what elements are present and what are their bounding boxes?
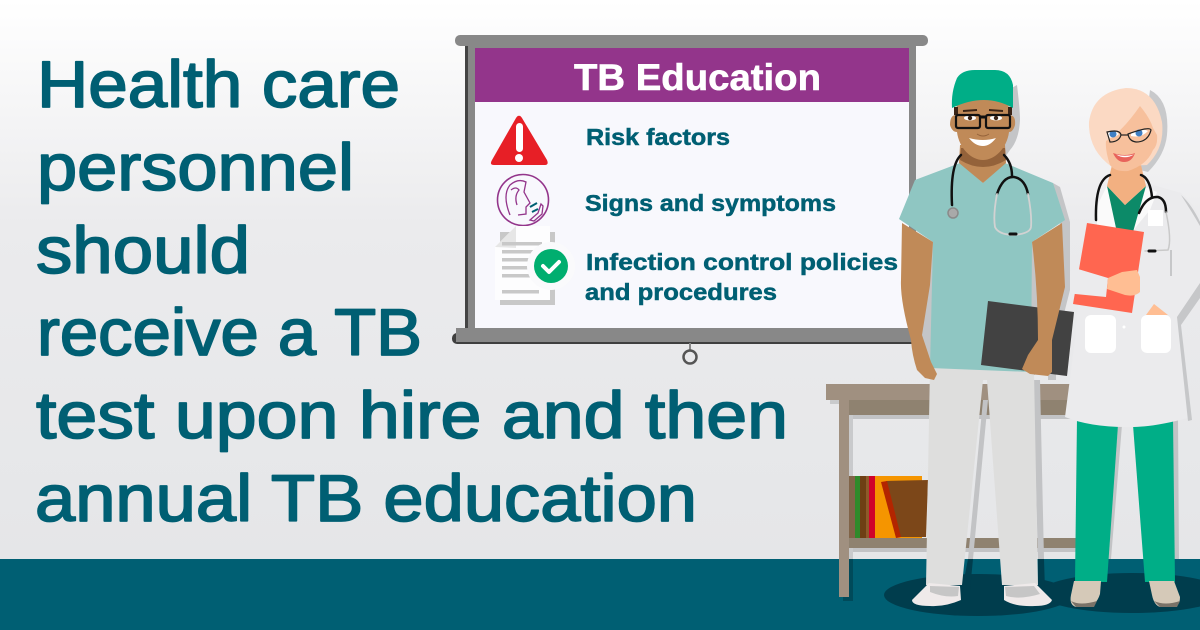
- screen list text: Signs and symptoms: [585, 190, 836, 216]
- projection screen: [452, 35, 928, 364]
- woman scrub top: [1107, 186, 1146, 232]
- headline: annual TB education: [35, 461, 697, 535]
- headline: Health care: [37, 47, 400, 121]
- woman glasses: [1107, 129, 1151, 142]
- man: [899, 70, 1074, 606]
- woman shoes: [1071, 581, 1180, 607]
- woman scrub trousers: [1075, 418, 1175, 582]
- man shoes: [912, 583, 1052, 606]
- woman leg shadows: [1107, 418, 1179, 559]
- icon: checked document: [495, 226, 575, 305]
- icon: coughing person: [498, 174, 548, 226]
- coat pockets: [1085, 210, 1171, 353]
- headline: receive a TB: [37, 295, 422, 369]
- man eyes: [964, 116, 1002, 120]
- shadow under man: [884, 574, 1072, 616]
- screen list text: [585, 124, 898, 305]
- man stethoscope: [948, 155, 1031, 235]
- woman face: [1106, 106, 1157, 171]
- woman: [1065, 88, 1200, 607]
- man right arm: [1022, 223, 1065, 376]
- coat lapels: [1096, 186, 1157, 240]
- screen list text: Risk factors: [586, 124, 730, 150]
- woman figure shadow: [1140, 90, 1167, 172]
- man trousers: [926, 366, 1038, 585]
- screen title banner: TB Education: [574, 57, 821, 98]
- man neck: [959, 145, 1006, 183]
- floor band: [0, 559, 1200, 630]
- woman smile: [1113, 153, 1135, 162]
- red clipboard: [1073, 223, 1144, 313]
- man shirt: [899, 163, 1065, 372]
- screen title banner: [475, 48, 909, 102]
- headline: test upon hire and then: [36, 378, 788, 452]
- man leg floor shadows: [962, 559, 1045, 590]
- table with books: [826, 384, 1079, 601]
- man nose: [977, 134, 989, 136]
- man upper shadow: [921, 85, 1070, 380]
- dark folder: [981, 301, 1074, 376]
- screen list text: Infection control policies: [586, 249, 898, 275]
- man head: [950, 100, 1015, 160]
- headline: [35, 47, 788, 535]
- man glasses: [956, 110, 1010, 128]
- woman eyes: [1108, 129, 1148, 138]
- icon: warning triangle: [491, 116, 548, 165]
- man leg shadows: [968, 380, 1044, 559]
- man surgical cap: [952, 70, 1013, 108]
- coat shadow: [1170, 195, 1200, 421]
- hand tip above pocket: [1146, 304, 1168, 315]
- man left arm: [901, 223, 937, 380]
- man sideburns: [954, 107, 1012, 115]
- woman stethoscope: [1096, 175, 1170, 251]
- headline: personnel: [37, 130, 354, 204]
- man neck shadow: [960, 148, 1006, 167]
- woman neck: [1107, 165, 1146, 205]
- shadow under woman: [1040, 573, 1200, 613]
- man smile: [969, 138, 996, 146]
- screen list text: and procedures: [585, 279, 777, 305]
- woman teeth: [1116, 154, 1134, 157]
- woman hair: [1089, 88, 1162, 167]
- woman lab coat: [1065, 180, 1200, 427]
- woman arm: [1065, 269, 1140, 297]
- headline: should: [36, 213, 250, 287]
